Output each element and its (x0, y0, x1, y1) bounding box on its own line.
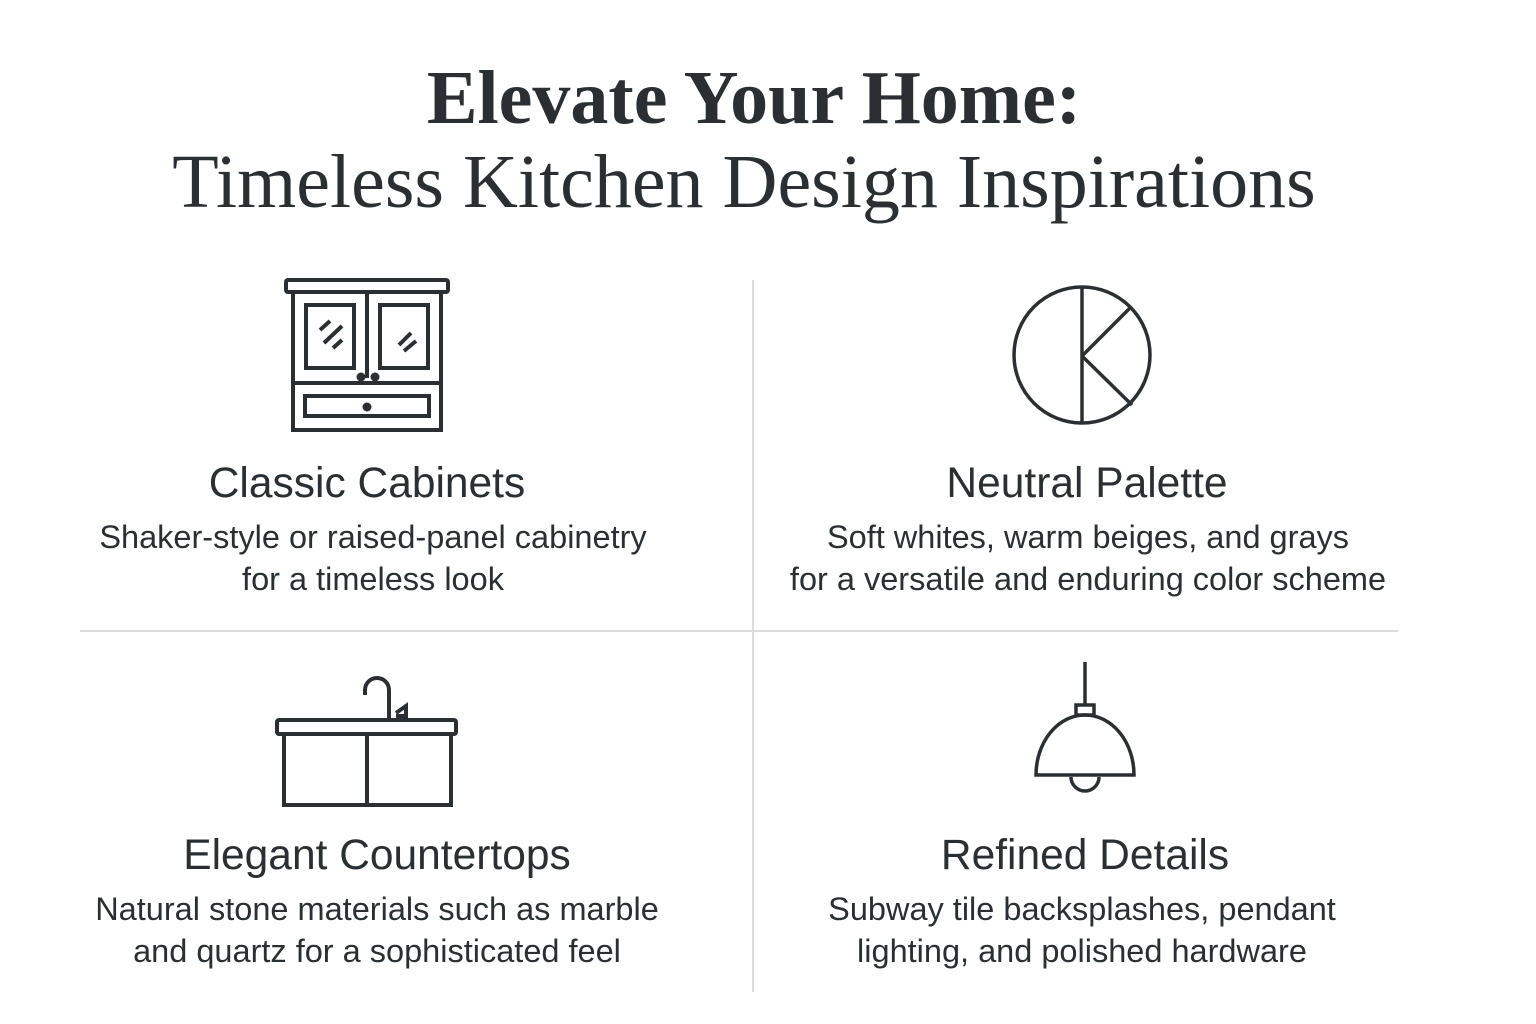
title (172, 56, 1316, 224)
text: elegant countertops (95, 891, 659, 969)
title: Elevate Your Home: (427, 56, 1081, 140)
text: neutral palette: Soft whites, warm beiges, and grays (827, 519, 1349, 555)
text: elegant countertops: and quartz for a sophisticated feel (133, 933, 621, 969)
text: refined details: Subway tile backsplashes, pendant (828, 891, 1336, 927)
text: neutral palette: for a versatile and enduring color scheme (790, 561, 1386, 597)
icon: pendant lamp (1036, 662, 1134, 791)
text: elegant countertops: Natural stone materials such as marble (95, 891, 659, 927)
icon: neutral palette circle (1014, 287, 1150, 423)
text: classic cabinets (99, 519, 647, 597)
title: Timeless Kitchen Design Inspirations (172, 140, 1316, 224)
icon: sink (277, 678, 456, 805)
heading: refined details: Refined Details (941, 832, 1229, 879)
text: neutral palette (790, 519, 1386, 597)
icon: cabinet (286, 280, 448, 430)
heading: neutral palette: Neutral Palette (946, 460, 1228, 507)
heading: elegant countertops: Elegant Countertops (183, 832, 571, 879)
text: classic cabinets: Shaker-style or raised-panel cabinetry (99, 519, 647, 555)
heading: classic cabinets: Classic Cabinets (209, 460, 525, 507)
text: refined details (828, 891, 1336, 969)
text: refined details: lighting, and polished hardware (857, 933, 1307, 969)
text: classic cabinets: for a timeless look (242, 561, 504, 597)
